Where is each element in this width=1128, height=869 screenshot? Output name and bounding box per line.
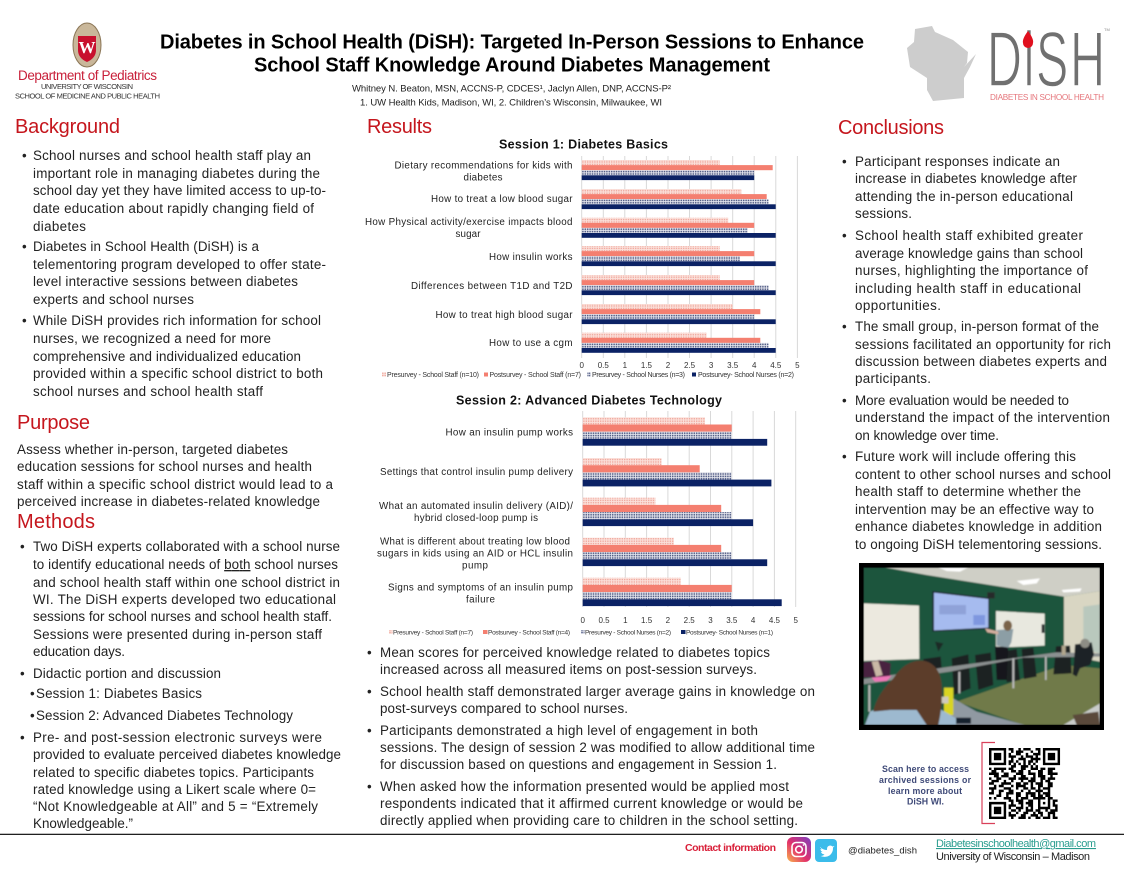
axis labels: session 1: 4.5 <box>770 361 782 370</box>
legend: session 1 <box>382 372 794 379</box>
contact details: University of Wisconsin – Madison <box>936 851 1090 863</box>
panel: background: important role in managing diabetes during the <box>33 166 320 181</box>
category labels: session 2: What is different about treating low blood <box>380 536 570 548</box>
panel: conclusions <box>838 117 1111 552</box>
panel: methods: • <box>20 730 25 745</box>
panel: conclusions: intervention may be an effective way to <box>855 502 1094 517</box>
category labels: session 2: How an insulin pump works <box>446 428 573 438</box>
axis labels: session 1: 1.5 <box>641 361 653 370</box>
panel: purpose <box>17 412 334 509</box>
text block: results bullets: Mean scores for perceived knowledge related to diabetes topics <box>380 645 770 660</box>
authors and affiliations: 1. UW Health Kids, Madison, WI, 2. Children’s Wisconsin, Milwaukee, WI <box>360 98 662 108</box>
callout: scan here: DiSH WI. <box>907 796 944 806</box>
callout: scan here: learn more about <box>888 786 962 796</box>
heading: results: Results <box>367 116 432 138</box>
panel: conclusions: Future work will include offering this <box>855 449 1076 464</box>
panel: conclusions: nurses, highlighting the importance of <box>855 263 1088 278</box>
axis labels: session 2: 1 <box>623 616 628 625</box>
axis labels: session 1 <box>579 361 800 370</box>
panel: methods: Pre- and post-session electronic surveys were <box>33 730 322 745</box>
panel: purpose: perceived increase in diabetes-related knowledge <box>17 494 320 509</box>
icon: twitter <box>815 839 837 862</box>
icon: university crest: W <box>78 38 96 57</box>
legend: session 2: Postsurvey- School Nurses (n=1) <box>686 630 773 636</box>
axis labels: session 2: 0.5 <box>598 616 610 625</box>
icon: university crest <box>73 23 101 67</box>
panel: background: • <box>22 239 27 254</box>
panel: background: While DiSH provides rich information for school <box>33 313 321 328</box>
panel: methods: • <box>20 666 25 681</box>
legend: session 2 <box>389 630 773 636</box>
axis labels: session 2: 4 <box>751 616 756 625</box>
photo: presenter in a classroom <box>859 563 1104 730</box>
panel: conclusions: Participant responses indicate an <box>855 154 1060 169</box>
legend: session 1: Presurvey - School Staff (n=10) <box>387 372 479 379</box>
panel: conclusions: School health staff exhibited greater <box>855 228 1084 243</box>
heading: background: Background <box>15 116 120 138</box>
panel: conclusions: average knowledge gains than school <box>855 246 1083 261</box>
panel: methods: education days. <box>33 644 125 659</box>
category labels: session 2: pump <box>462 560 489 572</box>
panel: conclusions: • <box>842 154 847 169</box>
panel: methods: WI. The DiSH experts developed two educational <box>33 592 336 607</box>
panel: background: diabetes <box>33 219 86 234</box>
panel: methods: Sessions were presented during in-person staff <box>33 627 322 642</box>
text block: results bullets: • <box>367 684 372 699</box>
bars: session 2 <box>583 417 782 606</box>
category labels: session 1 <box>365 160 573 349</box>
panel: conclusions: opportunities. <box>855 298 941 313</box>
panel: background: school day yet they have limited access to up-to- <box>33 183 326 198</box>
panel: methods: “Not Knowledgeable at All” and 5 = “Extremely <box>33 799 318 814</box>
category labels: session 2: failure <box>466 594 496 606</box>
panel: conclusions: • <box>842 393 847 408</box>
panel: methods: Didactic portion and discussion <box>33 666 221 681</box>
axis labels: session 1: 1 <box>623 361 628 370</box>
legend: session 2: Presurvey - School Nurses (n=2) <box>585 630 671 636</box>
panel: methods: • <box>20 539 25 554</box>
category labels: session 1: How to treat a low blood sugar <box>431 194 573 205</box>
panel: purpose: Assess whether in-person, targeted diabetes <box>17 442 288 457</box>
legend: session 1: Postsurvey- School Nurses (n=2) <box>698 372 794 379</box>
axis labels: session 2: 2 <box>666 616 671 625</box>
chart: session 1 diabetes basics <box>365 138 800 379</box>
panel: methods: sessions for school nurses and school health staff. <box>33 609 332 624</box>
category labels: session 1: How insulin works <box>489 252 573 263</box>
axis labels: session 1: 0 <box>579 361 584 370</box>
category labels: session 2: Settings that control insulin pump delivery <box>380 467 573 478</box>
text block: results bullets: respondents indicated that it affirmed current knowledge or would be <box>380 796 803 811</box>
panel: methods: provided to evaluate perceived diabetes knowledge <box>33 747 341 762</box>
text block: results bullets: Participants demonstrated a high level of engagement in both <box>380 723 758 738</box>
panel: background: nurses, we recognized a need for more <box>33 331 271 346</box>
panel: background <box>15 116 326 399</box>
axis labels: session 2: 4.5 <box>769 616 781 625</box>
heading: purpose: Purpose <box>17 412 90 434</box>
axis labels: session 2: 3.5 <box>726 616 738 625</box>
panel: purpose: staff within a specific school district would lead to a <box>17 477 334 492</box>
panel: conclusions: health staff to determine whether the <box>855 484 1081 499</box>
panel: background: provided within a specific school district to both <box>33 366 323 381</box>
panel: conclusions: sessions. <box>855 206 912 221</box>
logo: DiSH: DIABETES IN SCHOOL HEALTH <box>990 93 1104 102</box>
text block: results bullets: for discussion based on questions and engagement in Session 1. <box>380 757 777 772</box>
panel: background: date education about rapidly changing field of <box>33 201 314 216</box>
category labels: session 1: sugar <box>456 229 481 240</box>
category labels: session 1: Dietary recommendations for kids with <box>394 160 572 172</box>
heading: methods: Methods <box>17 511 95 533</box>
panel: conclusions: understand the impact of the intervention <box>855 410 1110 425</box>
panel: methods: Session 2: Advanced Diabetes Technology <box>36 708 293 723</box>
legend: session 1: Presurvey - School Nurses (n=3) <box>592 372 685 379</box>
panel: conclusions: More evaluation would be needed to <box>855 393 1069 408</box>
axis labels: session 2: 0 <box>580 616 585 625</box>
panel: background: level interactive sessions between diabetes <box>33 274 298 289</box>
panel: conclusions: participants. <box>855 371 931 386</box>
category labels: session 1: How to use a cgm <box>489 338 572 349</box>
text block: results bullets: School health staff demonstrated larger average gains in knowledge on <box>380 684 815 699</box>
category labels: session 2: What an automated insulin delivery (AID)/ <box>379 501 573 512</box>
axis labels: session 2: 5 <box>793 616 798 625</box>
contact details: Diabetesinschoolhealth@gmail.com <box>936 838 1096 850</box>
panel: methods: to identify educational needs of both school nurses <box>33 557 338 572</box>
panel: conclusions: increase in diabetes knowledge after <box>855 171 1078 186</box>
text block: results bullets: • <box>367 779 372 794</box>
panel: background: experts and school nurses <box>33 292 194 307</box>
icon: QR code <box>989 748 1060 819</box>
panel: conclusions: The small group, in-person format of the <box>855 319 1099 334</box>
category labels: session 1: How Physical activity/exercise impacts blood <box>365 217 572 228</box>
category labels: session 2: sugars in kids using an AID or HCL insulin <box>377 548 573 560</box>
axis labels: session 1: 4 <box>752 361 757 370</box>
logo: Department of Pediatrics: Department of Pediatrics <box>18 68 157 83</box>
contact details <box>936 838 1096 863</box>
panel: methods: • <box>30 686 35 701</box>
axis labels: session 1: 2.5 <box>684 361 696 370</box>
panel: conclusions: • <box>842 228 847 243</box>
panel: methods: related to specific diabetes topics. Participants <box>33 765 314 780</box>
bars: session 1 <box>582 160 776 353</box>
chart title: session 1: Session 1: Diabetes Basics <box>499 138 668 152</box>
category labels: session 1: How to treat high blood sugar <box>436 310 573 321</box>
logo: Department of Pediatrics: UNIVERSITY OF WISCONSIN <box>41 82 133 91</box>
panel: background: • <box>22 313 27 328</box>
panel: conclusions: • <box>842 449 847 464</box>
chart title: session 2: Session 2: Advanced Diabetes Technology <box>456 394 722 408</box>
title: Diabetes in School Health (DiSH): Targeted In-Person Sessions to Enhance <box>160 32 864 54</box>
axis labels: session 1: 5 <box>795 361 800 370</box>
authors and affiliations: Whitney N. Beaton, MSN, ACCNS-P, CDCES¹, Jaclyn Allen, DNP, ACCNS-P² <box>352 84 671 94</box>
chart: session 2 advanced diabetes technology <box>377 394 798 636</box>
text block: results bullets: post-surveys compared to school nurses. <box>380 701 628 716</box>
axis labels: session 2: 3 <box>708 616 713 625</box>
axis labels: session 2: 1.5 <box>641 616 653 625</box>
axis labels: session 1: 0.5 <box>598 361 609 370</box>
title: School Staff Knowledge Around Diabetes Management <box>254 54 770 76</box>
category labels: session 2: hybrid closed-loop pump is <box>414 513 538 524</box>
panel: conclusions: including health staff in educational <box>855 281 1081 296</box>
panel: conclusions: • <box>842 319 847 334</box>
category labels: session 2: Signs and symptoms of an insulin pump <box>388 582 574 594</box>
logo: Department of Pediatrics: SCHOOL OF MEDICINE AND PUBLIC HEALTH <box>15 92 160 100</box>
category labels: session 1: diabetes <box>464 172 503 184</box>
panel: conclusions: to ongoing DiSH telementoring sessions. <box>855 537 1102 552</box>
panel: conclusions: discussion between diabetes experts and <box>855 354 1107 369</box>
category labels: session 2 <box>377 428 574 606</box>
text block: results bullets: When asked how the information presented would be applied most <box>380 779 789 794</box>
panel: conclusions: content to other school nurses and school <box>855 467 1111 482</box>
social handle: @diabetes_dish <box>848 846 917 856</box>
panel: conclusions: sessions facilitated an opportunity for rich <box>855 337 1111 352</box>
panel: background: comprehensive and individualized education <box>33 349 301 364</box>
panel: background: Diabetes in School Health (DiSH) is a <box>33 239 260 254</box>
panel: background: telementoring program developed to offer state- <box>33 257 326 272</box>
panel: methods: Two DiSH experts collaborated with a school nurse <box>33 539 340 554</box>
panel: methods: • <box>30 708 35 723</box>
text block: results bullets <box>367 645 815 828</box>
logo: DiSH: DiSH <box>987 15 1105 103</box>
bracket around QR code <box>982 742 995 824</box>
panel: background: • <box>22 148 27 163</box>
category labels: session 1: Differences between T1D and T2D <box>411 281 572 292</box>
panel: background: school nurses and school health staff <box>33 384 263 399</box>
title <box>160 32 864 76</box>
divider line <box>0 833 1124 835</box>
panel: conclusions: enhance diabetes knowledge in addition <box>855 519 1102 534</box>
icon: instagram <box>787 837 811 862</box>
text block: results bullets: • <box>367 723 372 738</box>
axis labels: session 2: 2.5 <box>684 616 695 625</box>
axis labels: session 1: 3 <box>709 361 714 370</box>
panel: background: School nurses and school health staff play an <box>33 148 311 163</box>
axis labels: session 2 <box>580 616 798 625</box>
legend: session 2: Postsurvey - School Staff (n=4) <box>488 630 570 636</box>
authors and affiliations <box>352 84 671 108</box>
panel: purpose: education sessions for school nurses and health <box>17 459 312 474</box>
icon: Wisconsin state map <box>907 26 976 101</box>
panel: methods: Session 1: Diabetes Basics <box>36 686 202 701</box>
axis labels: session 1: 2 <box>666 361 671 370</box>
icon: blood drop <box>1023 31 1033 48</box>
legend: session 1: Postsurvey - School Staff (n=7) <box>490 372 581 379</box>
callout: scan here: archived sessions or <box>879 775 972 785</box>
logo: DiSH: TM <box>1104 27 1110 32</box>
logo: Department of Pediatrics <box>15 23 160 100</box>
contact information: Contact information <box>685 842 776 854</box>
panel: methods: rated knowledge using a Likert scale where 0= <box>33 782 316 797</box>
text block: results bullets: • <box>367 645 372 660</box>
panel: conclusions: on knowledge over time. <box>855 428 999 443</box>
axis labels: session 1: 3.5 <box>727 361 739 370</box>
text block: results bullets: directly applied when providing care to children in the school setting. <box>380 813 798 828</box>
panel: conclusions: attending the in-person educational <box>855 189 1073 204</box>
text block: results bullets: increased across all measured items on post-session surveys. <box>380 662 757 677</box>
panel: methods <box>17 511 341 831</box>
legend: session 2: Presurvey - School Staff (n=7) <box>393 630 473 636</box>
panel: methods: and school health staff within one school district in <box>33 575 340 590</box>
callout: scan here: Scan here to access <box>882 764 969 774</box>
text block: results bullets: sessions. The design of session 2 was modified to allow additional time <box>380 740 815 755</box>
panel: methods: Knowledgeable.” <box>33 816 133 831</box>
heading: conclusions: Conclusions <box>838 117 944 139</box>
